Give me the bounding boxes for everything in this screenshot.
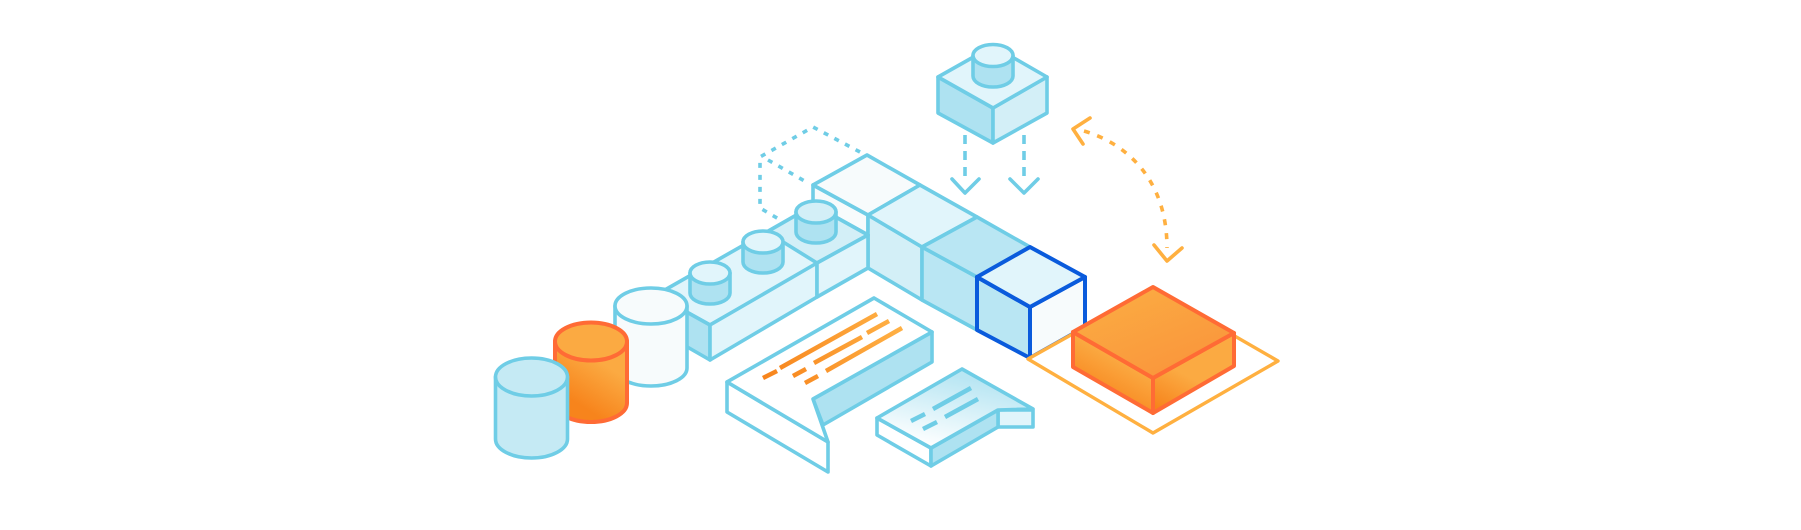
cylinder: light blue xyxy=(496,358,568,458)
text lines xyxy=(763,314,902,383)
document card xyxy=(727,298,932,472)
cylinder: orange xyxy=(555,322,627,422)
cube: pale second xyxy=(868,185,977,300)
card lines xyxy=(911,388,978,429)
long block with studs xyxy=(656,201,868,360)
cube: mid blue third xyxy=(922,217,1030,330)
stud 1 xyxy=(690,262,730,304)
stud 3 xyxy=(796,201,836,243)
orange block xyxy=(1073,287,1234,413)
arrow: orange curved xyxy=(1073,118,1182,261)
cylinder: white xyxy=(615,288,687,386)
orange platform outline xyxy=(1028,289,1278,433)
row of cubes xyxy=(813,155,1030,330)
cube: highlighted blue xyxy=(977,247,1085,358)
arrow: left dashed down xyxy=(952,135,979,193)
dashed ghost cube xyxy=(760,127,860,221)
cube: white back xyxy=(813,155,920,240)
small card xyxy=(877,369,1033,466)
top stud xyxy=(973,44,1013,87)
arrow: right dashed down xyxy=(1010,135,1038,193)
top floating cube xyxy=(938,44,1047,143)
stud 2 xyxy=(743,231,783,273)
